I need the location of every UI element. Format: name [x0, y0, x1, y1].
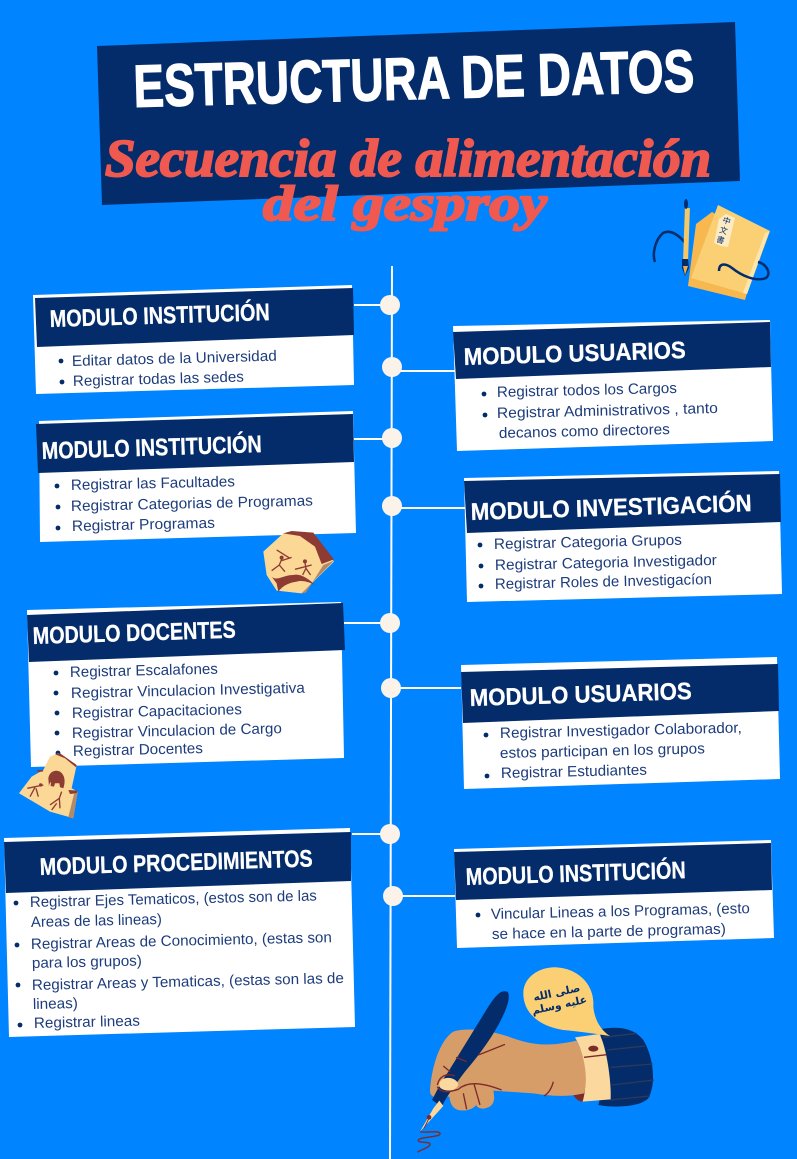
panel heading: MODULO USUARIOS: [469, 678, 692, 712]
panel heading: MODULO USUARIOS: [463, 337, 686, 371]
panel list: Areas de las lineas): [31, 911, 162, 931]
panel list: Registrar Administrativos , tanto: [497, 400, 718, 422]
panel heading: MODULO INVESTIGACIÓN: [470, 489, 752, 526]
icon: hand writing with pen: [417, 967, 654, 1152]
panel list: Registrar Categoria Grupos: [494, 532, 682, 553]
panel list: estos participan en los grupos: [500, 740, 705, 762]
folder label: 中: [721, 215, 732, 227]
panel list: se hace en la parte de programas): [492, 921, 726, 943]
panel list: Registrar todos los Cargos: [497, 380, 677, 401]
panel list: Registrar Estudiantes: [501, 762, 647, 782]
panel list: [478, 532, 717, 593]
panel list: [54, 661, 306, 760]
panel heading: MODULO INSTITUCIÓN: [49, 298, 270, 333]
panel list: Registrar Vinculacion de Cargo: [72, 720, 282, 742]
panel list: Registrar Areas y Tematicas, (estas son las de: [32, 970, 344, 994]
title banner: [97, 22, 740, 205]
panel list: Registrar Docentes: [73, 740, 203, 760]
panel: modulo institucion 2: [36, 411, 356, 542]
icon: rock painting with hunters: [263, 531, 334, 593]
folder label: 書: [715, 234, 726, 246]
icon: folder and brush: [654, 199, 770, 300]
icon: rock painting with mammoth: [19, 753, 78, 819]
panel list: Registrar todas las sedes: [73, 369, 244, 390]
panel list: Registrar Programas: [72, 515, 215, 535]
panel list: Registrar las Facultades: [71, 473, 235, 494]
arabic calligraphy: صلى الله: [532, 981, 581, 1004]
panel: modulo docentes: [27, 602, 345, 767]
panel list: lineas): [33, 995, 78, 1013]
panel heading: MODULO DOCENTES: [32, 617, 236, 650]
panel: modulo procedimientos: [4, 828, 355, 1037]
panel: modulo institucion 1: [33, 285, 354, 394]
panel list: decanos como directores: [499, 421, 670, 442]
panel heading: MODULO PROCEDIMIENTOS: [39, 845, 313, 881]
panel list: [55, 473, 313, 535]
panel list: Vincular Lineas a los Programas, (esto: [491, 900, 750, 923]
panel list: [59, 348, 277, 390]
arabic calligraphy: عليه وسلم: [531, 993, 588, 1017]
panel: modulo investigacion: [464, 471, 782, 602]
panel list: [476, 900, 750, 943]
panel list: para los grupos): [32, 953, 142, 972]
panel list: [482, 380, 718, 442]
subtitle: Secuencia de alimentación: [105, 130, 711, 188]
panel list: Registrar Escalafones: [70, 661, 218, 681]
panel list: [14, 887, 344, 1032]
panel list: [484, 720, 742, 782]
panel list: Registrar Areas de Conocimiento, (estas son: [31, 929, 332, 953]
panel list: Registrar Categorias de Programas: [71, 493, 313, 515]
panel heading: MODULO INSTITUCIÓN: [465, 856, 686, 891]
panel list: Registrar Roles de Investigacíon: [495, 571, 712, 593]
panel list: Registrar Ejes Tematicos, (estos son de las: [30, 887, 317, 911]
panel: modulo institucion 3: [454, 840, 774, 948]
panel: modulo usuarios 1: [453, 320, 773, 451]
panel heading: MODULO INSTITUCIÓN: [41, 430, 262, 465]
subtitle: del gesproy: [263, 175, 548, 231]
panel list: Registrar Categoria Investigador: [495, 552, 717, 574]
panel list: Registrar Capacitaciones: [72, 701, 242, 722]
timeline: [344, 266, 465, 1159]
panel list: Registrar Vinculacion Investigativa: [71, 680, 306, 702]
panel list: Registrar Investigador Colaborador,: [500, 720, 742, 742]
folder label: 文: [718, 224, 729, 236]
panel: modulo usuarios 2: [461, 657, 780, 789]
speech bubble: [523, 967, 610, 1036]
panel list: Registrar lineas: [34, 1013, 140, 1032]
subtitle: [105, 130, 711, 231]
panel list: Editar datos de la Universidad: [72, 348, 277, 370]
